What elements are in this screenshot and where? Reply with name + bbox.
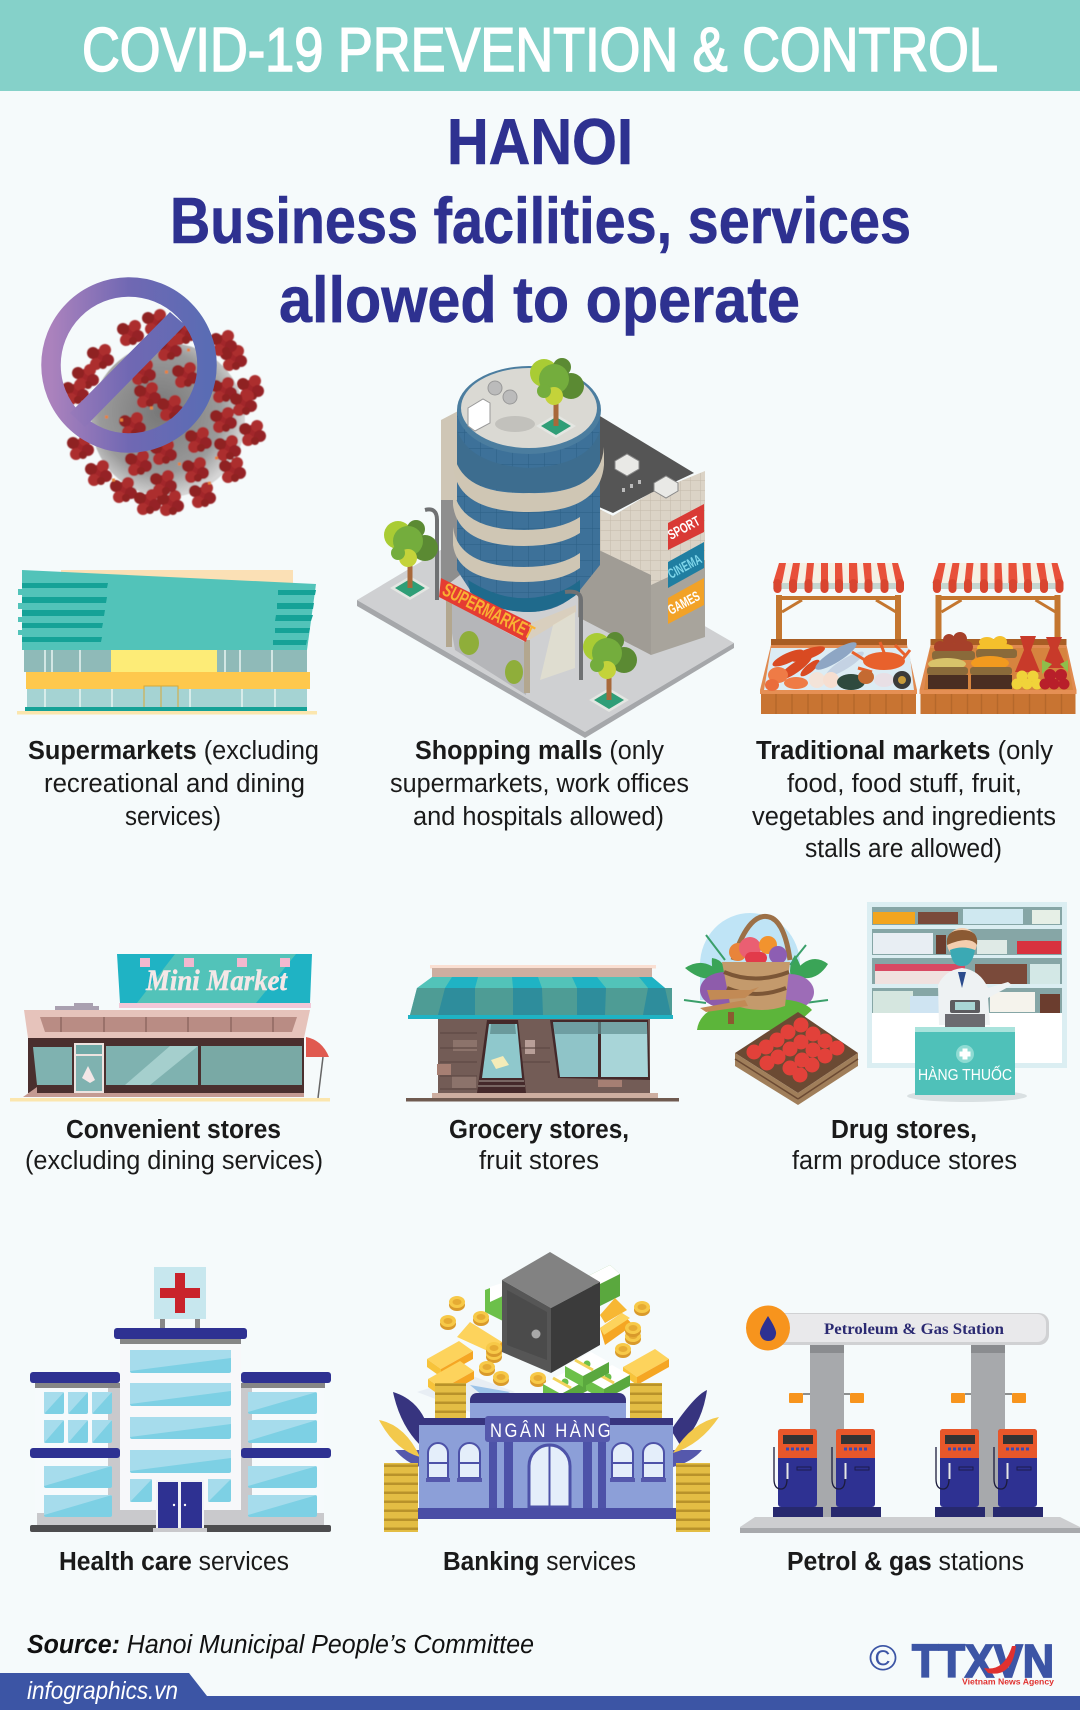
- stall one: seafood: [760, 563, 917, 714]
- illustration: drug store: [867, 902, 1067, 1102]
- window highlights: [44, 1350, 317, 1515]
- caption: shopping malls: Shopping malls (only: [415, 737, 664, 765]
- signs: CINEMA: [665, 551, 704, 582]
- source line: Source: Hanoi Municipal People’s Committee: [27, 1631, 534, 1659]
- sacks: [927, 656, 1012, 689]
- copyright mark: ©: [869, 1637, 897, 1678]
- ground: [740, 1517, 1080, 1533]
- signs: GAMES: [665, 588, 702, 618]
- caption: traditional markets: stalls are allowed): [805, 835, 1002, 863]
- caption: drug stores: Drug stores,: [831, 1116, 977, 1144]
- centre block: [120, 1344, 241, 1510]
- station sign: [746, 1306, 1049, 1350]
- teal facade: [22, 570, 316, 650]
- caption: supermarkets: [28, 737, 319, 831]
- counter label: HÀNG THUỐC: [918, 1064, 1012, 1084]
- window panels: [44, 1350, 317, 1517]
- nozzle hangers: [789, 1393, 1026, 1403]
- shellfish: [809, 670, 911, 690]
- illustration: supermarket: [17, 570, 317, 714]
- lower coin stacks: [384, 1463, 418, 1532]
- shelf products: [873, 909, 1061, 1013]
- main heading: HANOI: [447, 105, 633, 178]
- back walls: [441, 410, 460, 590]
- footer bar: [0, 1673, 1080, 1710]
- illustration: grocery store: [406, 965, 679, 1102]
- caption: grocery stores: Grocery stores,: [449, 1116, 629, 1144]
- counter: [915, 1027, 1015, 1095]
- caption: shopping malls: [390, 737, 689, 831]
- windows: [428, 1443, 664, 1478]
- caption: convenient stores: [25, 1116, 323, 1175]
- counter shadow: [907, 1090, 1027, 1102]
- glass front: [24, 650, 307, 672]
- caption: supermarkets: Supermarkets (excluding: [28, 737, 319, 765]
- columns: [489, 1442, 606, 1508]
- roof: [578, 410, 694, 513]
- main heading: allowed to operate: [279, 263, 800, 336]
- mini market sign: [117, 954, 312, 1008]
- sky: [700, 913, 800, 1000]
- header band: [0, 0, 1080, 91]
- awning: [306, 1037, 329, 1057]
- yellow sign panel: [111, 650, 217, 673]
- awning: [410, 977, 672, 1015]
- caption: supermarkets: recreational and dining: [44, 770, 305, 798]
- caption: shopping malls: and hospitals allowed): [413, 803, 664, 831]
- captions row three: [59, 1548, 1024, 1576]
- pillars: [810, 1345, 844, 1517]
- supermarket sign: [439, 578, 531, 642]
- caption: grocery stores: fruit stores: [479, 1147, 599, 1175]
- door: [153, 1480, 207, 1532]
- orange band: [26, 672, 310, 689]
- logotype: TTXVN: [912, 1635, 1054, 1687]
- illustration: traditional markets: [760, 563, 1076, 714]
- fish: [812, 638, 866, 680]
- base and ground: [25, 707, 307, 711]
- door: [477, 1020, 526, 1093]
- shop wall: [438, 1019, 650, 1093]
- mini market sign: Mini Market: [145, 964, 288, 997]
- cylindrical tower: [457, 410, 600, 612]
- gold bars: [427, 1298, 669, 1397]
- pharmacist: [938, 928, 1012, 1025]
- wings: [35, 1388, 120, 1513]
- caption: grocery stores: [449, 1116, 629, 1175]
- illustration: hospital: [30, 1267, 331, 1532]
- coins: [440, 1296, 650, 1387]
- door: [74, 1043, 104, 1097]
- caption: drug stores: [792, 1116, 1017, 1175]
- main heading: [170, 105, 911, 336]
- icon: coronavirus with prohibition sign: [51, 287, 266, 516]
- virus: [62, 309, 266, 516]
- entrance canopy: [529, 605, 576, 640]
- agency name: Vietnam News Agency: [962, 1676, 1054, 1686]
- bank sign label: NGÂN HÀNG: [490, 1420, 613, 1441]
- shrimp and lobster: [765, 643, 827, 691]
- ground plate: [357, 511, 734, 732]
- sign with red cross: [154, 1267, 206, 1328]
- main heading: Business facilities, services: [170, 184, 911, 257]
- crab: [852, 642, 910, 672]
- illustration: shopping mall: SUPERMARKET: [439, 580, 538, 644]
- pavement: [23, 1087, 304, 1097]
- store front glass: [28, 1038, 304, 1093]
- illustration: petrol station: [740, 1306, 1080, 1533]
- caption: drug stores: farm produce stores: [792, 1147, 1017, 1175]
- cash register: [945, 1000, 985, 1030]
- fuel pumps: [773, 1429, 823, 1517]
- captions row two: [25, 1116, 1017, 1175]
- globe swoosh: [984, 1646, 1016, 1674]
- store roof: [24, 1010, 310, 1038]
- caption: convenient stores: Convenient stores: [66, 1116, 281, 1144]
- station sign: Petroleum & Gas Station: [824, 1321, 1004, 1338]
- prohibition sign: [51, 287, 207, 443]
- door: [529, 1445, 570, 1507]
- bank sign: [485, 1416, 610, 1442]
- caption: banking: Banking services: [443, 1548, 636, 1576]
- caption: convenient stores: (excluding dining services): [25, 1147, 323, 1175]
- door: [144, 686, 178, 711]
- ground: [432, 1093, 658, 1098]
- lamp posts: [425, 509, 581, 680]
- stall two: fruit and produce: [920, 563, 1076, 714]
- roof vents: [615, 454, 678, 498]
- basket: [733, 916, 790, 960]
- caption: traditional markets: Traditional markets (only: [756, 737, 1053, 765]
- caption: petrol and gas: Petrol & gas stations: [787, 1548, 1024, 1576]
- shelving unit: [867, 902, 1067, 1068]
- bank building: [470, 1393, 626, 1423]
- onion baskets: [932, 632, 975, 660]
- leaves: [379, 1390, 719, 1467]
- navy roofs: [30, 1328, 331, 1458]
- documents behind: [417, 1375, 515, 1412]
- caption: health care: Health care services: [59, 1548, 289, 1576]
- shop window: [550, 1020, 650, 1080]
- wooden sign: [700, 987, 759, 1012]
- cash stacks: [543, 1370, 587, 1405]
- base: [417, 1508, 682, 1519]
- illustration: farm produce: [684, 913, 858, 1105]
- leaves and turnips: [685, 955, 828, 988]
- signs: SPORT: [665, 512, 703, 543]
- illustration: shopping mall: [357, 358, 734, 738]
- signs: [665, 504, 704, 624]
- tomato crate: [735, 1012, 858, 1093]
- safe: [502, 1252, 600, 1373]
- illustration: bank: [379, 1252, 719, 1532]
- base: [30, 1525, 331, 1532]
- mangoes: [976, 636, 1017, 658]
- caption: supermarkets: services): [125, 803, 221, 831]
- caption: traditional markets: food, food stuff, fruit,: [787, 770, 1022, 798]
- upper coin stacks: [435, 1383, 466, 1419]
- trees: [530, 358, 584, 438]
- caption: traditional markets: vegetables and ingredients: [752, 803, 1056, 831]
- illustration: convenience store: [10, 954, 330, 1102]
- roof equipment: [55, 1003, 99, 1010]
- bushes: [459, 631, 479, 655]
- cash behind safe: [485, 1282, 505, 1322]
- caption: shopping malls: supermarkets, work offices: [390, 770, 689, 798]
- TTXVN logo: [869, 1635, 1054, 1687]
- red bags and fruit: [1012, 636, 1070, 690]
- icon: cross: [956, 1045, 974, 1063]
- caption: traditional markets: [752, 737, 1056, 863]
- captions row one: [28, 737, 1056, 863]
- website: infographics.vn: [27, 1677, 178, 1705]
- rooftop units: [468, 381, 517, 431]
